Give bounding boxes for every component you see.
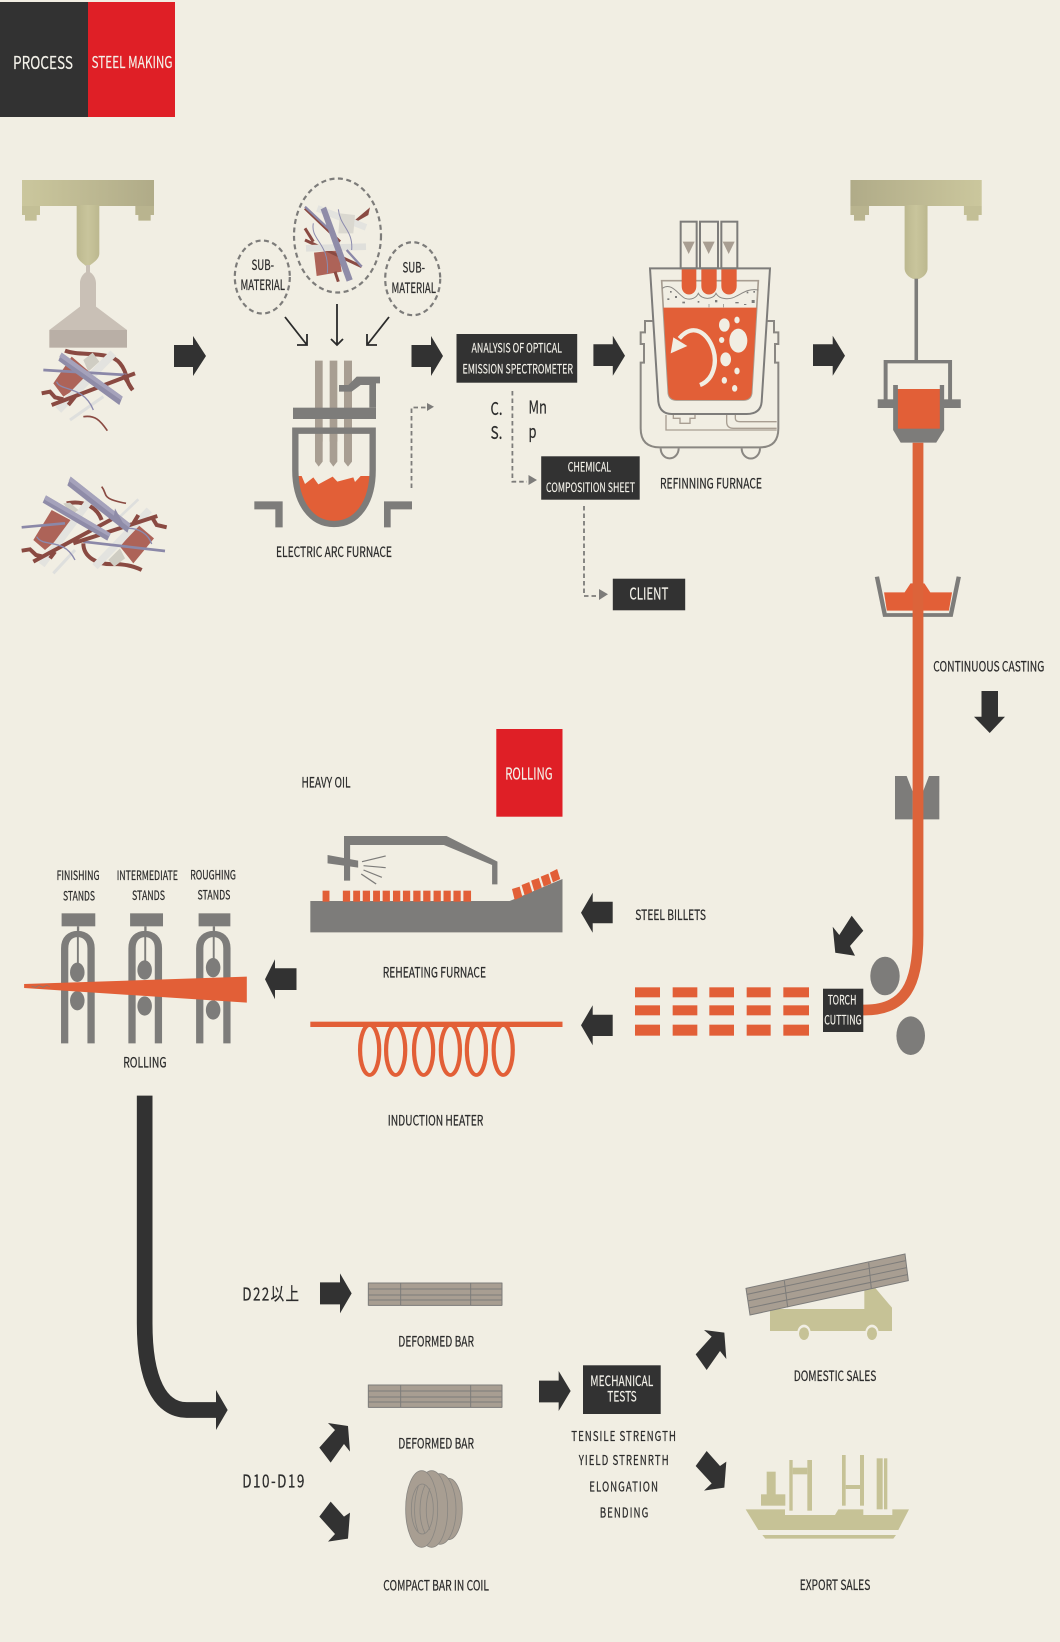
- arrow: furnace to analysis: [412, 336, 443, 376]
- icon: electric arc furnace: [254, 361, 412, 527]
- box: client: [613, 579, 685, 610]
- arrow: diagonal to torch cutting: [833, 916, 863, 956]
- text: test list: TENSILE STRENGTH: [571, 1426, 676, 1446]
- box: analysis of optical emission spectrometer: EMISSION SPECTROMETER: [462, 358, 573, 377]
- label: refining furnace: REFINNING FURNACE: [660, 473, 762, 493]
- labels: stands: STANDS: [198, 884, 230, 903]
- label: domestic sales: DOMESTIC SALES: [794, 1366, 876, 1386]
- label: heavy oil: HEAVY OIL: [302, 773, 351, 793]
- text: test list: BENDING: [600, 1502, 648, 1522]
- arrow: d10 up to deformed bar: [319, 1423, 350, 1463]
- heading: rolling: ROLLING: [505, 760, 553, 784]
- icon: scrap pile under magnet: [42, 351, 135, 431]
- arrow: billets to reheating furnace: [581, 893, 613, 933]
- icon: billets: [635, 987, 809, 1036]
- callout: sub-material right: [385, 242, 440, 315]
- heading: rolling: [496, 729, 562, 817]
- arrow: scrap to furnace: [174, 336, 206, 376]
- callout: sub-material left: [235, 240, 290, 314]
- icon: compact bar coil: [406, 1471, 462, 1547]
- label: induction heater: INDUCTION HEATER: [388, 1110, 483, 1130]
- box: mechanical tests: MECHANICAL: [590, 1370, 653, 1391]
- arrow: analysis to refining: [593, 336, 625, 376]
- text: chemical elements: p: [528, 418, 536, 444]
- arrow: d10 down to coil: [319, 1502, 350, 1542]
- callout: scrap circle: [294, 178, 381, 292]
- box: client: CLIENT: [629, 580, 668, 604]
- callout: sub-material left: SUB-: [252, 255, 274, 275]
- arrow: dashed to spectrometer: [412, 403, 434, 488]
- icon: molten steel stream: [823, 443, 918, 1010]
- text: chemical elements: Mn: [528, 393, 547, 419]
- label: rolling: ROLLING: [123, 1052, 166, 1072]
- arrow: to export sales: [696, 1451, 726, 1491]
- box: mechanical tests: TESTS: [607, 1386, 637, 1407]
- arrow: bars to mechanical tests: [539, 1371, 571, 1411]
- icon: rolling stands: [24, 913, 247, 1043]
- callout: sub-material right: MATERIAL: [392, 278, 436, 298]
- labels: diameter classes: [242, 1280, 304, 1493]
- icon: ladle crane: [850, 180, 982, 361]
- arrow: refining to ladle: [813, 336, 845, 376]
- labels: diameter classes: D22以上: [242, 1280, 299, 1306]
- icon: bars on truck: [746, 1254, 908, 1315]
- box: torch cutting: [823, 989, 863, 1032]
- box: mechanical tests: [583, 1365, 661, 1414]
- stand: intermediate: [130, 913, 163, 1043]
- icon: casting mold: [895, 776, 939, 819]
- icon: scrap crane with magnet: [22, 180, 154, 348]
- label: steel billets: STEEL BILLETS: [635, 905, 706, 925]
- text: chemical elements: [490, 393, 547, 445]
- labels: stands: [57, 864, 236, 905]
- icon: deformed bar top: [368, 1283, 502, 1306]
- arrow: casting down: [974, 691, 1005, 733]
- arrow: dashed to client: [584, 506, 608, 600]
- callout: sub-material right: SUB-: [402, 258, 425, 278]
- icon: tundish: [877, 577, 959, 615]
- labels: products: [383, 1332, 489, 1596]
- arrows: materials into furnace: [285, 304, 389, 345]
- arrow: billets to induction heater: [581, 1005, 613, 1045]
- text: chemical elements: S.: [490, 419, 502, 445]
- tab: steel making: [88, 2, 175, 117]
- group: sales: [696, 1254, 909, 1539]
- text: test list: ELONGATION: [589, 1476, 658, 1496]
- text: test list: [571, 1426, 676, 1522]
- labels: stands: FINISHING: [57, 865, 100, 884]
- box: chemical composition sheet: CHEMICAL: [568, 457, 611, 476]
- label: electric arc furnace: ELECTRIC ARC FURNACE: [276, 542, 392, 562]
- box: chemical composition sheet: [541, 456, 640, 500]
- box: torch cutting: CUTTING: [824, 1009, 862, 1028]
- arrow: dashed to chemical sheet: [512, 391, 537, 485]
- labels: stands: STANDS: [132, 885, 165, 904]
- tab: process: PROCESS: [13, 49, 73, 75]
- icon: ladle: [878, 362, 961, 443]
- text: test list: YIELD STRENRTH: [578, 1450, 669, 1470]
- icon: refining furnace: [641, 222, 778, 459]
- labels: diameter classes: D10-D19: [242, 1467, 304, 1493]
- labels: stands: STANDS: [63, 886, 95, 905]
- arrow: large bent arrow from rolling: [145, 1096, 228, 1430]
- box: torch cutting: TORCH: [828, 989, 856, 1008]
- text: chemical elements: C.: [490, 395, 502, 421]
- labels: products: DEFORMED BAR: [398, 1434, 474, 1454]
- label: reheating furnace: REHEATING FURNACE: [383, 963, 486, 983]
- icon: deformed bar lower: [368, 1385, 502, 1408]
- icon: scrap pile on ground: [22, 477, 167, 573]
- callout: sub-material left: MATERIAL: [240, 275, 285, 295]
- icon: ship: [746, 1455, 909, 1539]
- icon: guide rollers: [870, 957, 925, 1055]
- box: chemical composition sheet: COMPOSITION SHEET: [546, 477, 635, 496]
- icon: reheating furnace: [310, 836, 562, 932]
- group: bar products: [319, 1273, 571, 1547]
- labels: stands: INTERMEDIATE: [117, 865, 178, 884]
- icon: truck: [770, 1288, 892, 1341]
- arrow: heater to rolling: [265, 959, 296, 999]
- labels: stands: ROUGHING: [190, 864, 236, 883]
- box: analysis of optical emission spectrometer: [456, 334, 577, 383]
- label: export sales: EXPORT SALES: [800, 1575, 870, 1595]
- stand: finishing: [62, 913, 95, 1043]
- stand: roughing: [199, 913, 230, 1043]
- tab: steel making: STEEL MAKING: [92, 49, 172, 73]
- header tabs: [0, 2, 175, 117]
- icon: induction heater coil: [310, 1022, 562, 1075]
- box: analysis of optical emission spectrometer: ANALYSIS OF OPTICAL: [472, 338, 562, 357]
- labels: products: COMPACT BAR IN COIL: [383, 1576, 489, 1596]
- labels: products: DEFORMED BAR: [398, 1332, 474, 1352]
- arrow: d22 to deformed bar: [320, 1273, 352, 1313]
- tab: process: [0, 2, 88, 117]
- arrow: to domestic sales: [696, 1330, 726, 1370]
